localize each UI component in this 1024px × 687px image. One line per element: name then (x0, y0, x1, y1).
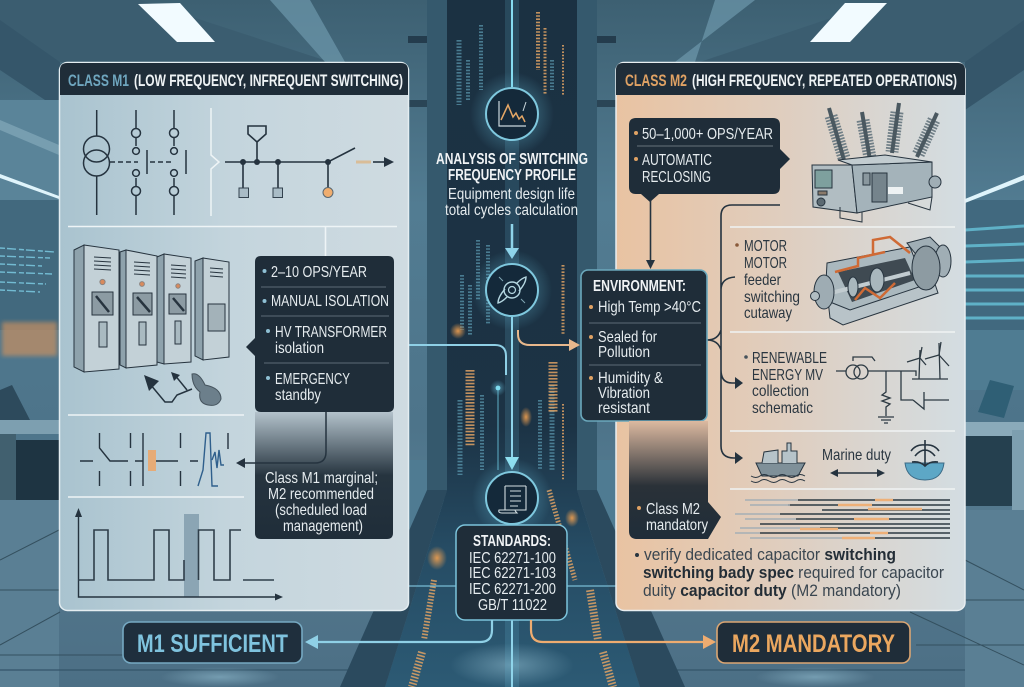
M2 specification callout: 50–1,000+ OPS/YEAR (642, 126, 773, 143)
motor feeder text: feeder (744, 272, 782, 289)
class M2 mandatory tag: Class M2 (646, 501, 700, 518)
class M2 mandatory tag: mandatory (646, 517, 708, 534)
standards box: IEC 62271-103 (469, 565, 556, 582)
M1 specification callout: HV TRANSFORMER (275, 324, 387, 341)
environment box: ENVIRONMENT: (593, 278, 686, 295)
standards box: GB/T 11022 (478, 597, 547, 614)
arrow: standards to M2 mandatory (531, 620, 716, 649)
arrow: standards to M1 sufficient (305, 620, 492, 649)
standards box: STANDARDS: (473, 533, 551, 550)
M1 marginal note: (scheduled load (275, 502, 367, 519)
class M2 mandatory tag (629, 421, 721, 539)
M1 marginal note (255, 412, 393, 539)
application bracket with arrows (707, 205, 780, 464)
panel: class M1 (60, 62, 408, 610)
arrow: flow to class M1 panel (408, 345, 506, 375)
node: switching decision icon (472, 250, 552, 330)
switching duty pulse chart (75, 508, 283, 600)
ship icon (751, 443, 805, 482)
renewable energy text: schematic (752, 400, 813, 417)
M2 panel heading: CLASS M2 (625, 72, 687, 90)
capacitor duty note: switching bady spec required for capacitor (643, 563, 944, 582)
motor feeder text: switching (744, 289, 800, 306)
switchgear cabinets illustration (74, 245, 229, 372)
environment box (581, 270, 707, 421)
connector lines beside standards box (408, 585, 616, 587)
outcome: M1 sufficient: M1 SUFFICIENT (137, 630, 288, 658)
environment box: Pollution (598, 344, 650, 361)
renewable energy text (744, 350, 827, 417)
renewable energy text: collection (752, 383, 809, 400)
capacitor duty note: duity capacitor duty (M2 mandatory) (643, 581, 901, 600)
analysis heading and description: ANALYSIS OF SWITCHING (436, 151, 588, 168)
M1 panel heading (60, 63, 408, 95)
M1 specification callout: 2–10 OPS/YEAR (271, 264, 367, 281)
single-line transformer and isolator schematic (84, 110, 186, 215)
operation timeline lines (735, 500, 950, 538)
M1 specification callout: EMERGENCY (275, 371, 350, 388)
environment box: Humidity & (598, 370, 663, 387)
M1 marginal note: M2 recommended (268, 486, 374, 503)
node: standards document icon (472, 458, 552, 538)
motor feeder text: MOTOR (744, 255, 787, 272)
M2 specification callout: AUTOMATIC (642, 152, 712, 169)
M2 specification callout (629, 118, 790, 202)
environment box: Vibration (598, 385, 650, 402)
capacitor duty note (635, 545, 944, 600)
standards box: IEC 62271-200 (469, 581, 556, 598)
analysis heading and description (436, 151, 588, 219)
analysis heading and description: Equipment design life (448, 186, 575, 203)
outcome: M1 sufficient (123, 622, 302, 663)
M1 marginal note: management) (283, 518, 363, 535)
renewable energy text: ENERGY MV (752, 367, 823, 384)
motor feeder text: cutaway (744, 305, 792, 322)
arrow: callout to waveform (236, 412, 326, 468)
arrow: callout to environment box (646, 200, 655, 269)
M1 panel heading: (LOW FREQUENCY, INFREQUENT SWITCHING) (134, 72, 403, 90)
arrow: flow to environment box (518, 330, 580, 351)
renewable collection schematic (836, 342, 949, 423)
central flow line (505, 0, 519, 687)
motor feeder text (735, 238, 800, 322)
node: analysis icon (470, 72, 554, 156)
motor cutaway illustration (810, 237, 951, 325)
M1 specification callout (246, 256, 394, 412)
busbar schematic (225, 126, 394, 198)
environment box: resistant (598, 400, 650, 417)
outcome: M2 mandatory (717, 622, 910, 663)
arrow: analysis to decision (505, 224, 519, 259)
environment box: High Temp >40°C (598, 299, 701, 316)
motor feeder text: MOTOR (744, 238, 787, 255)
M2 specification callout: RECLOSING (642, 169, 711, 186)
M1 marginal note: Class M1 marginal; (265, 470, 378, 487)
M1 specification callout: standby (275, 387, 321, 404)
M1 specification callout: isolation (275, 340, 324, 357)
M1 specification callout: MANUAL ISOLATION (271, 293, 389, 310)
renewable energy text: RENEWABLE (752, 350, 827, 367)
outcome: M2 mandatory: M2 MANDATORY (732, 630, 895, 658)
standards box (456, 525, 567, 620)
standards box: IEC 62271-100 (469, 550, 556, 567)
double arrow (830, 469, 885, 477)
contact and waveform schematic (80, 433, 228, 486)
marine duty icons: Marine duty (822, 447, 891, 464)
M2 panel heading (616, 63, 965, 95)
capacitor duty note: verify dedicated capacitor switching (644, 545, 896, 564)
key and operating arrows icon (144, 372, 221, 405)
analysis heading and description: total cycles calculation (445, 202, 578, 219)
panel: class M2 (581, 62, 965, 610)
anchor and water icon (905, 440, 944, 480)
M1 panel heading: CLASS M1 (68, 72, 129, 90)
vacuum circuit breaker illustration (812, 103, 941, 222)
environment box: Sealed for (598, 329, 658, 346)
marine duty icons (751, 440, 944, 482)
analysis heading and description: FREQUENCY PROFILE (448, 167, 576, 184)
data columns in the central channel (412, 12, 613, 687)
